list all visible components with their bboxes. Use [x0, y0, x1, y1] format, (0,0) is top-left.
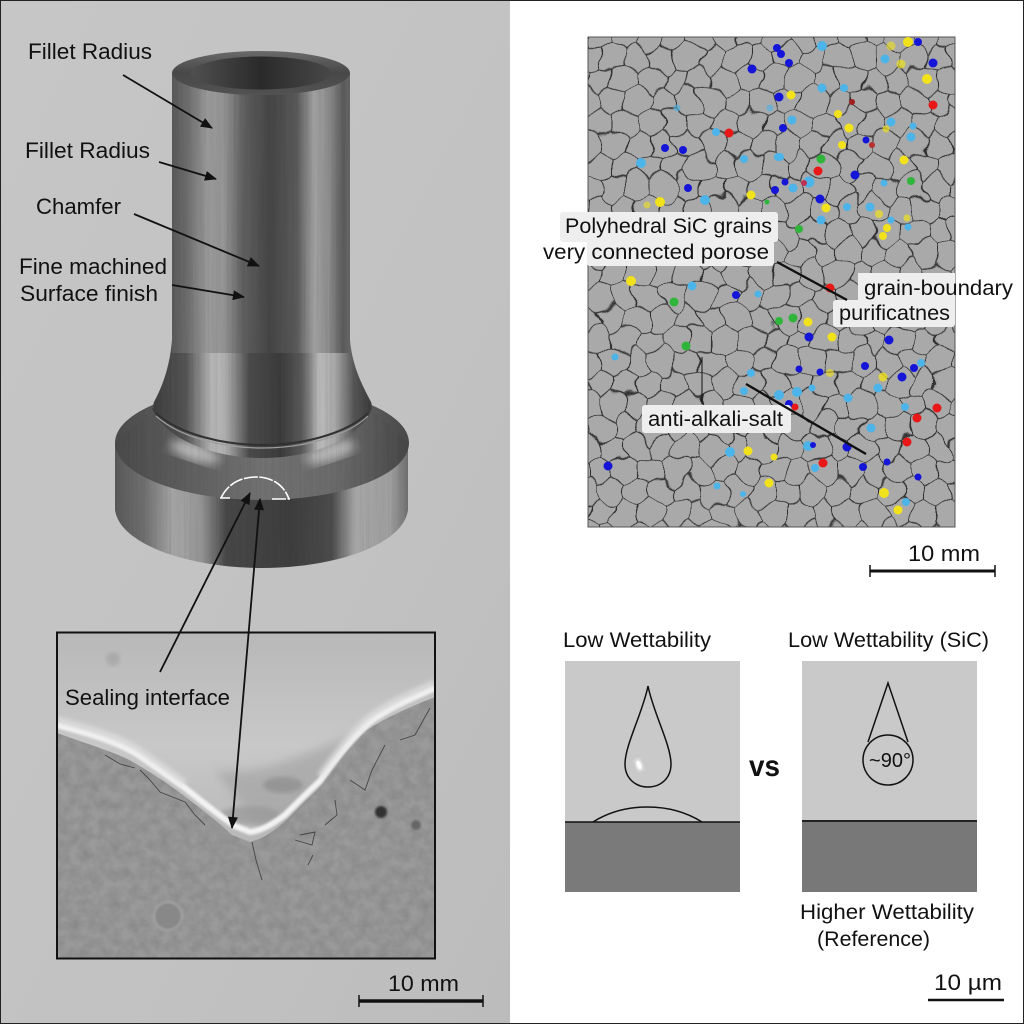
label: fine machined surface finish: Surface finish [20, 281, 158, 306]
base top ledge [115, 386, 409, 500]
flared neck [153, 340, 372, 445]
scale bar: left: 10 mm [388, 971, 459, 996]
inset frame [57, 632, 435, 958]
inset micrograph: sealing interface [57, 632, 435, 958]
label: fine machined surface finish: Fine machined [19, 254, 167, 279]
upper void region [58, 634, 408, 842]
surface cracks [105, 708, 430, 880]
panel: left background [0, 0, 510, 1024]
sealing interface marker [220, 477, 290, 499]
scale bar: left [359, 971, 483, 1007]
icon: drop with angle [868, 683, 908, 742]
panel: right droplet: ~90° [869, 750, 911, 772]
grain field [588, 38, 954, 526]
callout: anti-alkali-salt: anti-alkali-salt [648, 407, 783, 431]
callout: polyhedral SiC grains: Polyhedral SiC grains [565, 214, 772, 238]
left callout labels [19, 39, 167, 306]
label: sealing interface: Sealing interface [65, 685, 230, 710]
scale bar: wettability: 10 µm [934, 970, 1002, 995]
panel: right droplet [802, 661, 977, 892]
base cylinder [115, 443, 408, 568]
pits [375, 806, 387, 818]
label: fillet radius 2: Fillet Radius [25, 138, 150, 163]
top rim [172, 51, 350, 95]
label: fillet radius 1: Fillet Radius [28, 39, 152, 64]
scale bar: wettability [928, 970, 1004, 1000]
vs: vs [749, 750, 780, 783]
callout: polyhedral SiC grains: very connected porose [543, 240, 769, 264]
bright interface edge [57, 688, 435, 832]
panel: SiC microstructure [543, 36, 1013, 528]
ledge highlights [167, 435, 223, 469]
upper shaft [172, 73, 350, 353]
callout: grain-boundary purificatnes [833, 273, 1013, 327]
caption: higher wettability: (Reference) [817, 927, 930, 951]
leader arrows [123, 75, 260, 828]
panel: left droplet [565, 661, 740, 892]
leader lines [702, 262, 866, 454]
callout: polyhedral SiC grains [543, 212, 778, 266]
phase dots [604, 37, 942, 514]
callout: grain-boundary purificatnes: grain-boundary [864, 276, 1013, 300]
icon: spread droplet [593, 807, 702, 822]
heading: low wettability SiC: Low Wettability (SiC) [788, 628, 989, 652]
callout: grain-boundary purificatnes: purificatnes [839, 301, 950, 325]
wettability comparison [563, 628, 989, 951]
icon: falling drop [625, 686, 671, 787]
collar ring [156, 413, 368, 445]
scale bar: microstructure [870, 541, 995, 577]
bore [191, 56, 331, 90]
caption: higher wettability: Higher Wettability [800, 900, 974, 924]
brushed texture [115, 73, 408, 568]
label: chamfer: Chamfer [36, 194, 121, 219]
machined SiC component [115, 51, 409, 568]
substrate surface [57, 697, 435, 958]
scale bar: microstructure: 10 mm [908, 541, 980, 566]
lower collar band [152, 408, 372, 458]
heading: low wettability: Low Wettability [563, 628, 711, 652]
